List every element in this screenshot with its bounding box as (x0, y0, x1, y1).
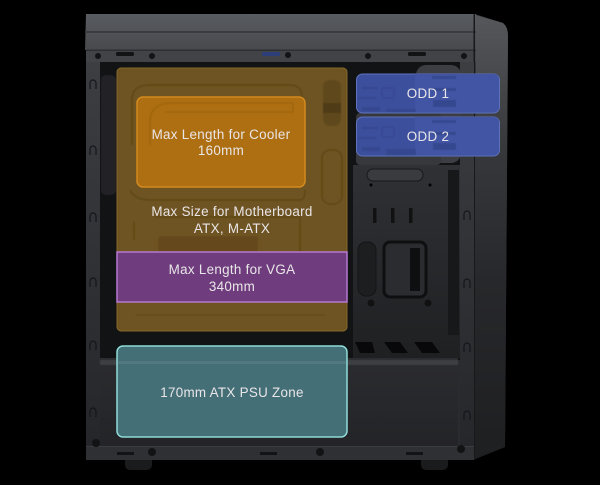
shroud cable slots (355, 342, 440, 353)
bottom rail (86, 447, 474, 460)
motherboard label: Max Size for Motherboard (151, 204, 313, 219)
drive bay arc (416, 65, 461, 163)
cooler label: Max Length for Cooler (152, 127, 291, 142)
interior dark cavity (99, 62, 461, 360)
case feet (125, 456, 448, 470)
top panel (85, 14, 476, 50)
PSU shroud (100, 358, 458, 447)
PSU label: 170mm ATX PSU Zone (160, 385, 304, 400)
zone: PSU (117, 346, 347, 437)
front bezel (473, 15, 508, 460)
cable openings (358, 169, 432, 306)
zone: VGA (117, 252, 347, 302)
zone: cooler (137, 97, 305, 187)
right rail (460, 62, 474, 460)
rail keyholes (90, 80, 470, 420)
screw details (92, 52, 467, 456)
ODD 2 label: ODD 2 (407, 129, 449, 144)
zone: VGA: 340mm (209, 279, 255, 294)
left rail (86, 62, 100, 448)
VGA label: Max Length for VGA (169, 262, 295, 277)
ODD 1 label: ODD 1 (407, 86, 449, 101)
motherboard tray (353, 165, 460, 358)
zone: motherboard (117, 68, 347, 331)
zone: ODD 1 (356, 74, 500, 113)
zone: cooler: 160mm (198, 143, 244, 158)
zone: motherboard: ATX, M-ATX (194, 221, 270, 236)
zone: ODD 2 (356, 117, 500, 156)
PCI slots (448, 170, 459, 335)
left fan gap (101, 75, 116, 195)
drive bay frame (356, 113, 441, 165)
case body (86, 14, 508, 460)
top rail (86, 50, 476, 62)
tray embossing (130, 80, 342, 315)
computer case (85, 14, 508, 470)
